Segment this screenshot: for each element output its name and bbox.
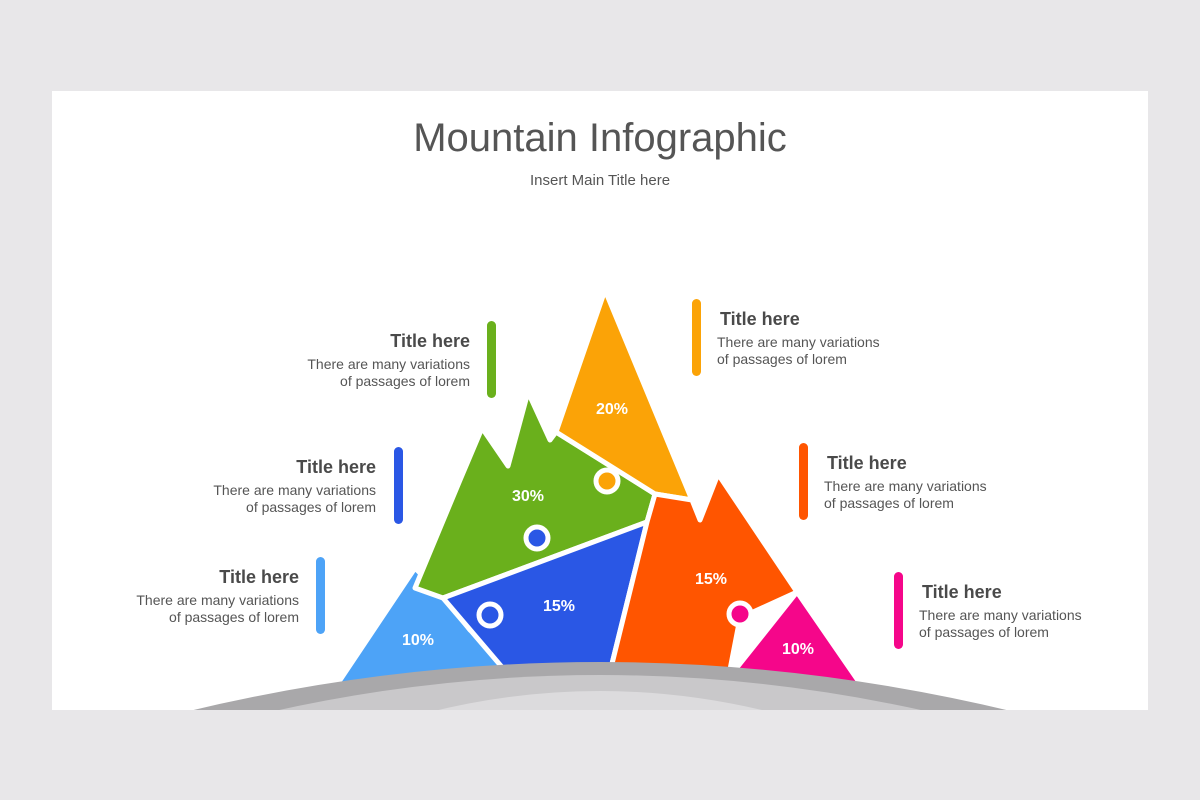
text block: pink: There are many variations xyxy=(919,607,1082,623)
text block: red: of passages of lorem xyxy=(824,495,954,511)
text block: light blue xyxy=(136,567,299,625)
label light 10%: 10% xyxy=(402,632,434,649)
piece: pink 10% xyxy=(720,592,868,695)
text block: blue: Title here xyxy=(296,457,376,477)
text block: red xyxy=(824,453,987,511)
bar pink xyxy=(894,572,903,649)
label 20%: 20% xyxy=(596,401,628,418)
text block: light blue: of passages of lorem xyxy=(169,609,299,625)
text block: green xyxy=(307,331,470,389)
ground xyxy=(185,662,1015,712)
piece: orange 20% xyxy=(556,290,692,500)
piece: blue 15% xyxy=(443,522,659,680)
text block: light blue: Title here xyxy=(219,567,299,587)
bar green xyxy=(487,321,496,398)
piece: red-orange 15% xyxy=(608,474,797,680)
text block: light blue: There are many variations xyxy=(136,592,299,608)
title: Mountain Infographic xyxy=(413,116,787,160)
piece: green 30% xyxy=(415,392,655,598)
text block: blue: There are many variations xyxy=(213,482,376,498)
piece: light blue 10% xyxy=(330,568,530,695)
label 30%: 30% xyxy=(512,488,544,505)
bar red xyxy=(799,443,808,520)
text block: green: Title here xyxy=(390,331,470,351)
subtitle: Insert Main Title here xyxy=(530,172,670,189)
text block: pink: of passages of lorem xyxy=(919,624,1049,640)
text block: red: Title here xyxy=(827,453,907,473)
text block: orange: Title here xyxy=(720,309,800,329)
text block: orange: of passages of lorem xyxy=(717,351,847,367)
text block: orange xyxy=(717,309,880,367)
label blue 15%: 15% xyxy=(543,598,575,615)
text block: green: of passages of lorem xyxy=(340,373,470,389)
text block: pink xyxy=(919,582,1082,640)
bar orange xyxy=(692,299,701,376)
label pink 10%: 10% xyxy=(782,641,814,658)
text block: pink: Title here xyxy=(922,582,1002,602)
card xyxy=(52,91,1148,710)
text block: blue: of passages of lorem xyxy=(246,499,376,515)
label orange 15%: 15% xyxy=(695,571,727,588)
text block: blue xyxy=(213,457,376,515)
bar blue xyxy=(394,447,403,524)
text block: red: There are many variations xyxy=(824,478,987,494)
text block: green: There are many variations xyxy=(307,356,470,372)
bar light blue xyxy=(316,557,325,634)
text block: orange: There are many variations xyxy=(717,334,880,350)
